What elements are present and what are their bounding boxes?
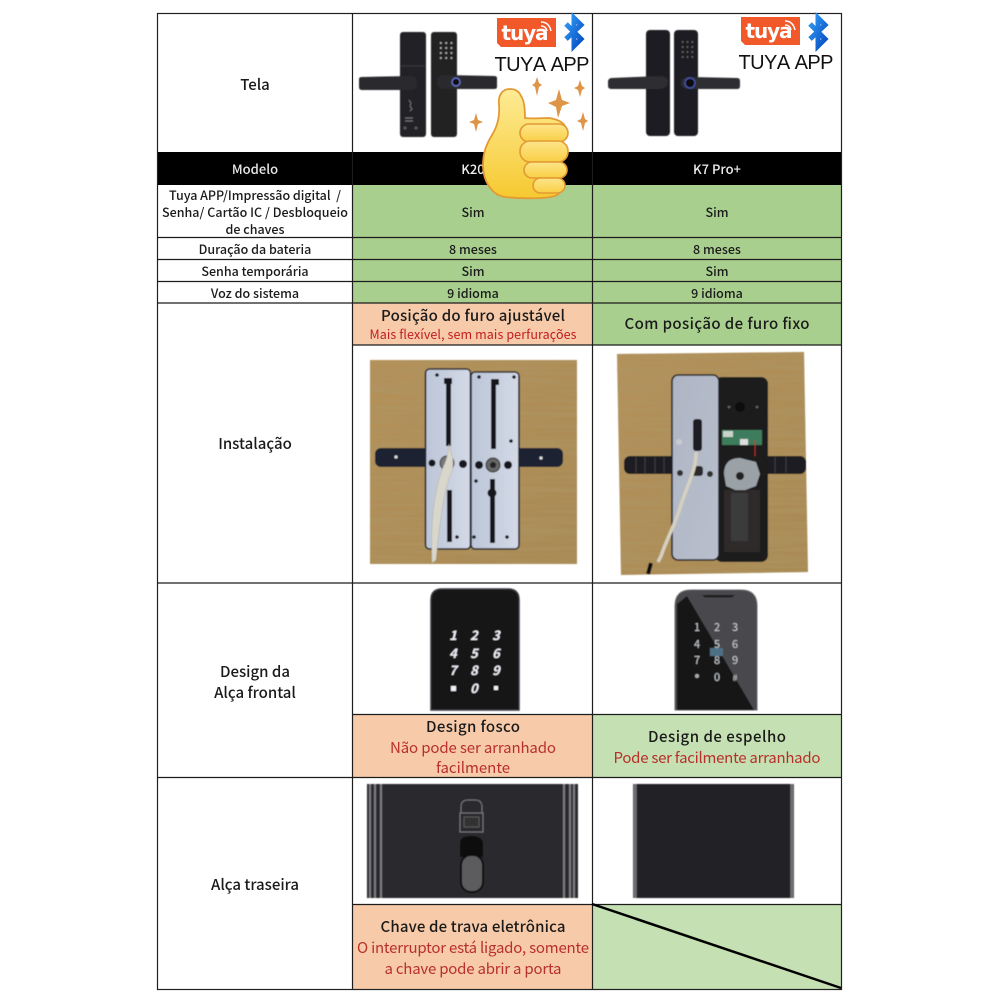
photo: K7 Pro+ mirror keypad: 4 — [694, 636, 700, 652]
comparison values rows: Sim — [706, 261, 728, 280]
left column row labels: Instalação — [218, 433, 292, 454]
diagonal not-applicable slash — [592, 904, 841, 988]
photo: K20 front keypad: 5 — [470, 643, 479, 662]
photo: K20 rear handle — [367, 784, 578, 898]
header row: Modelo black band: K7 Pro+ — [693, 159, 741, 178]
left column row labels: Alça traseira — [211, 874, 299, 895]
photo: K20 installation plates — [370, 360, 577, 564]
photo: K7 Pro+ mirror keypad: 6 — [732, 636, 738, 652]
comparison values rows: 8 meses — [693, 239, 741, 258]
callout: matte design: Não pode ser arranhado — [390, 737, 556, 758]
comparison values rows: 9 idioma — [447, 283, 499, 302]
photo: K7 Pro+ mirror keypad: # — [732, 671, 738, 684]
callout: mirror design — [614, 726, 820, 768]
logo: tuya K20: tuya — [502, 21, 548, 45]
header row: Modelo black band: K20 — [461, 159, 485, 178]
logo: tuya K20 — [497, 18, 581, 47]
callout: matte design: facilmente — [436, 757, 510, 778]
heading: adjustable hole position: Posição do furo ajustável — [381, 305, 565, 326]
photo: K7 Pro+ mirror keypad: 1 — [694, 619, 700, 635]
left column row labels: Voz do sistema — [210, 283, 299, 302]
comparison values rows: 8 meses — [449, 239, 497, 258]
lock photo K7 Pro+ — [608, 30, 740, 136]
comparison values rows: 9 idioma — [691, 283, 743, 302]
label: TUYA APP K20: TUYA APP — [494, 54, 590, 76]
icon: thumbs up with sparkles — [469, 77, 588, 198]
photo: K20 front keypad: 6 — [492, 643, 502, 662]
photo: K7 Pro+ mirror keypad: 8 — [714, 652, 720, 668]
callout: electronic lock key — [357, 916, 589, 979]
photo: K7 Pro+ mirror keypad: 2 — [714, 619, 720, 635]
callout: matte design — [390, 716, 556, 778]
callout: mirror design: Pode ser facilmente arranhado — [614, 747, 820, 768]
heading: adjustable hole position — [370, 305, 577, 343]
callout: electronic lock key: Chave de trava eletrônica — [380, 916, 566, 937]
photo: K20 front keypad: 1 — [449, 625, 457, 644]
photo: K7 Pro+ mirror keypad: 5 — [714, 636, 720, 652]
left column row labels: Senha temporária — [201, 261, 309, 280]
photo: K20 front keypad: 2 — [470, 625, 479, 644]
comparison values rows — [447, 202, 743, 302]
logo: tuya K7 Pro+: tuya — [746, 19, 792, 43]
photo: K7 Pro+ mirror keypad: 9 — [732, 652, 738, 668]
photo: K7 Pro+ mirror keypad — [675, 590, 757, 710]
callout: electronic lock key: a chave pode abrir a porta — [384, 958, 562, 979]
callout: matte design: Design fosco — [426, 716, 520, 737]
left column row labels: Senha/ Cartão IC / Desbloqueio — [162, 202, 348, 221]
photo: K20 front keypad: 8 — [470, 660, 479, 679]
heading: adjustable hole position: Mais flexível, sem mais perfurações — [370, 324, 577, 343]
photo: K20 front keypad: 3 — [492, 625, 501, 644]
callout: mirror design: Design de espelho — [648, 726, 786, 747]
photo: K7 Pro+ installation — [615, 350, 810, 578]
photo: K20 front keypad: 0 — [470, 678, 480, 697]
photo: K20 front keypad: 9 — [492, 660, 502, 679]
heading: fixed hole position: Com posição de furo fixo — [624, 313, 810, 334]
label: TUYA APP K7 Pro+: TUYA APP — [738, 52, 834, 74]
left column row labels: Tuya APP/Impressão digital / — [169, 185, 341, 204]
comparison values rows: Sim — [462, 202, 484, 221]
photo: K20 front keypad: 7 — [449, 660, 459, 679]
header row: Modelo black band — [157, 152, 841, 185]
lock photo K20 — [359, 32, 497, 137]
logo: tuya K7 Pro+ — [741, 17, 825, 46]
left column row labels: Duração da bateria — [199, 239, 311, 258]
table grid lines — [157, 13, 842, 990]
left column row labels: Tela — [240, 74, 270, 95]
left column row labels: Alça frontal — [214, 682, 296, 703]
photo: K20 front keypad — [431, 589, 519, 710]
left column row labels: de chaves — [226, 219, 284, 238]
photo: K7 Pro+ mirror keypad: 3 — [732, 619, 738, 635]
comparison values rows: Sim — [462, 261, 484, 280]
left column row labels — [162, 74, 348, 895]
panel: green and peach cell fills — [352, 185, 841, 989]
header row: Modelo black band: Modelo — [232, 159, 278, 178]
comparison values rows: Sim — [706, 202, 728, 221]
photo: K7 Pro+ mirror keypad: 0 — [714, 669, 720, 685]
left column row labels: Design da — [220, 661, 290, 682]
callout: electronic lock key: O interruptor está ligado, somente — [357, 937, 589, 958]
photo: K7 Pro+ mirror keypad: 7 — [694, 652, 700, 668]
photo: K20 front keypad: 4 — [449, 643, 458, 662]
photo: K7 Pro+ rear handle — [633, 784, 794, 898]
